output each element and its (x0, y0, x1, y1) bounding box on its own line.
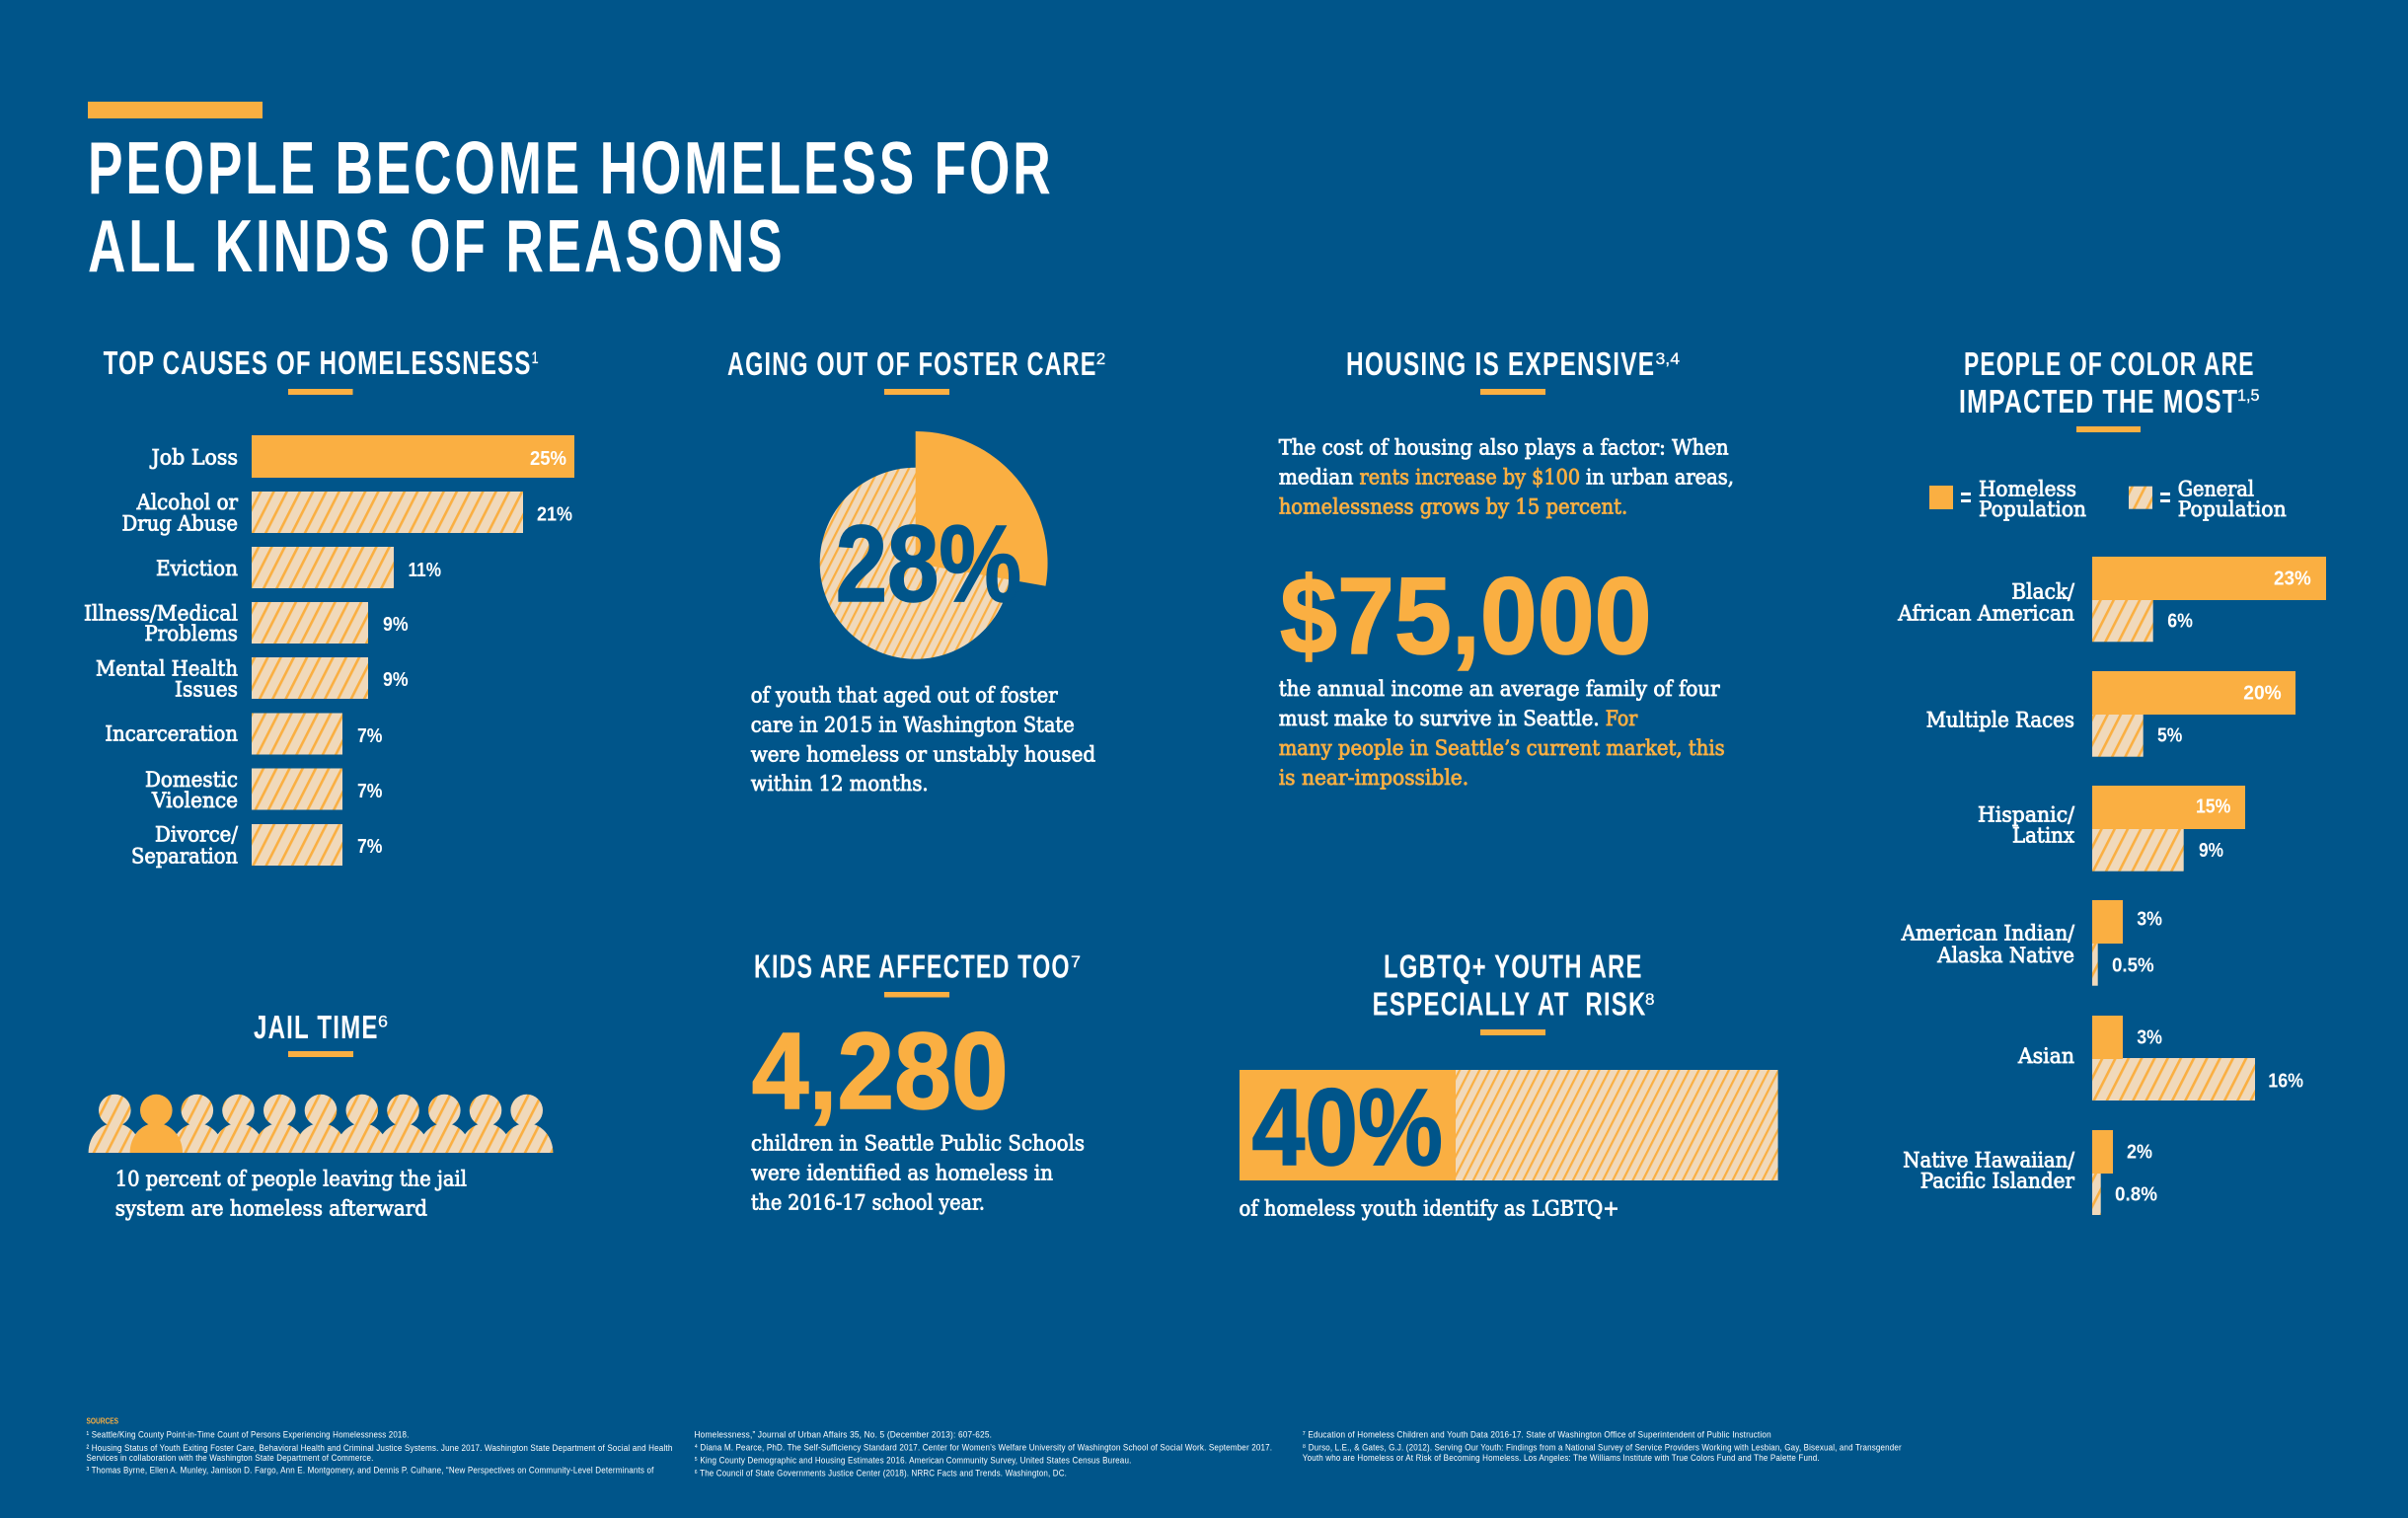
bar: domestic violence 7%: Violence (151, 789, 238, 813)
bars: hispanic/latinx (1978, 786, 2245, 872)
bars: native hawaiian/pacific islander: 2% (2127, 1141, 2152, 1164)
heading: foster care: 2 (1096, 349, 1105, 368)
bars: hispanic/latinx: Hispanic/ (1978, 803, 2075, 828)
text: income statement (1279, 677, 1725, 791)
heading: people of color (1959, 345, 2260, 432)
text: kids statistic (751, 1132, 1085, 1216)
big number: $75,000: $75,000 (1280, 556, 1652, 677)
sources: ² Housing Status of Youth Exiting Foster Care, Behavioral Health and Criminal Justice Systems. June 2017. Washington State Department of Social and Health (87, 1443, 673, 1454)
chart: 40% bar (1240, 1067, 1778, 1188)
bars: multiple races (1926, 671, 2295, 757)
bar: mental health issues 9% (96, 657, 409, 703)
bar: divorce/separation 7% (131, 823, 383, 870)
sources: ⁸ Durso, L.E., & Gates, G.J. (2012). Serving Our Youth: Findings from a National Survey of Service Providers Working with Lesbian, Gay, Bisexual, and Transgender (1303, 1442, 1902, 1453)
bar: job loss 25%: Job Loss (150, 446, 238, 471)
text: cost of housing: median (1279, 466, 1354, 491)
text: income statement: is near-impossible. (1279, 766, 1468, 791)
bars: native hawaiian/pacific islander: 0.8% (2115, 1183, 2157, 1206)
sources: ⁶ The Council of State Governments Justice Center (2018). NRRC Facts and Trends. Washington, DC. (695, 1469, 1067, 1480)
bar: illness/medical problems 9%: Illness/Medical (84, 602, 238, 627)
bar: mental health issues 9%: 9% (383, 668, 409, 691)
heading: jail time: 6 (378, 1013, 388, 1031)
heading: top causes (104, 344, 539, 395)
bar: incarceration 7%: 7% (357, 724, 383, 747)
bar: job loss 25%: 25% (530, 447, 566, 470)
text: income statement: many people in Seattle’s current market, this (1279, 736, 1725, 761)
heading: people of color: IMPACTED THE MOST (1959, 383, 2238, 419)
heading: lgbtq: 8 (1645, 990, 1654, 1009)
sources: ⁴ Diana M. Pearce, PhD. The Self-Sufficiency Standard 2017. Center for Women’s Welfare University of Washington School of Social Work. September 2017. (695, 1443, 1272, 1454)
bars: hispanic/latinx: 9% (2199, 839, 2223, 862)
legend (1929, 478, 2287, 522)
sources (87, 1416, 1902, 1480)
title block: ALL KINDS OF REASONS (88, 205, 786, 288)
panel: top causes of homelessness (84, 344, 574, 870)
bars: asian (2017, 1016, 2303, 1101)
panel: aging out of foster care (727, 345, 1105, 797)
heading: top causes: TOP CAUSES OF HOMELESSNESS (104, 344, 532, 381)
bar: domestic violence 7%: 7% (357, 780, 383, 802)
text: foster care statistic: care in 2015 in Washington State (751, 713, 1075, 738)
heading: foster care (727, 345, 1105, 395)
panel: housing is expensive (1279, 345, 1734, 791)
bars: hispanic/latinx: Latinx (2012, 824, 2074, 849)
bars: native hawaiian/pacific islander: Native Hawaiian/ (1903, 1149, 2075, 1174)
bars: asian: 3% (2137, 1025, 2162, 1048)
text: foster care statistic (751, 684, 1095, 797)
heading: kids (754, 949, 1081, 997)
heading: people of color: PEOPLE OF COLOR ARE (1964, 345, 2255, 382)
sources: ⁵ King County Demographic and Housing Estimates 2016. American Community Survey, United States Census Bureau. (695, 1456, 1131, 1467)
heading: lgbtq (1373, 949, 1654, 1035)
text: kids statistic: the 2016-17 school year. (751, 1191, 985, 1216)
bar: domestic violence 7%: Domestic (145, 768, 238, 793)
panel: kids are affected too (751, 949, 1085, 1216)
text: foster care statistic: within 12 months. (751, 772, 929, 797)
heading: foster care: AGING OUT OF FOSTER CARE (727, 345, 1097, 382)
sources: ⁷ Education of Homeless Children and Youth Data 2016-17. State of Washington Office of Superintendent of Public Instruction (1303, 1430, 1771, 1441)
bars: asian: 16% (2268, 1069, 2303, 1092)
text: jail statistic: 10 percent of people leaving the jail (115, 1168, 467, 1192)
sources: Youth who are Homeless or At Risk of Becoming Homeless. Los Angeles: The Williams Institute with True Colors Fund and The Palette Fund. (1303, 1453, 1820, 1464)
bars: american indian/alaska native: 3% (2137, 908, 2162, 931)
bars: american indian/alaska native: Alaska Native (1936, 944, 2074, 968)
chart: 40% bar: 40% (1251, 1067, 1443, 1188)
bar: incarceration 7%: Incarceration (105, 722, 238, 747)
bar: alcohol or drug abuse 21%: Alcohol or (136, 491, 239, 515)
bar: illness/medical problems 9%: 9% (383, 613, 409, 636)
text: lgbtq statistic: of homeless youth identify as LGBTQ+ (1240, 1197, 1619, 1222)
title block (88, 102, 1054, 288)
heading: people of color: 1,5 (2237, 386, 2260, 405)
legend: General (2178, 478, 2254, 502)
big number: 4,280: 4,280 (752, 1011, 1009, 1132)
bar: illness/medical problems 9%: Problems (144, 622, 238, 646)
bars: multiple races: Multiple Races (1926, 709, 2074, 733)
sources: Homelessness,” Journal of Urban Affairs 35, No. 5 (December 2013): 607-625. (695, 1430, 992, 1441)
text: foster care statistic: were homeless or unstably housed (751, 742, 1095, 768)
bars: black/african american: African American (1897, 602, 2074, 627)
bars: native hawaiian/pacific islander (1903, 1130, 2157, 1215)
text: foster care statistic: of youth that aged out of foster (751, 684, 1058, 709)
bars: multiple races: 20% (2243, 682, 2282, 705)
text: income statement: must make to survive in Seattle. (1279, 707, 1600, 731)
bar: illness/medical problems 9% (84, 602, 409, 646)
bars: multiple races: 5% (2157, 724, 2182, 747)
bar: incarceration 7% (105, 713, 383, 754)
sources: SOURCES (87, 1416, 119, 1425)
sources: Services in collaboration with the Washington State Department of Commerce. (87, 1453, 373, 1464)
text: cost of housing: in urban areas, (1586, 466, 1734, 491)
heading: jail time: JAIL TIME (254, 1009, 379, 1045)
bars: black/african american: 23% (2274, 568, 2311, 590)
heading: housing: HOUSING IS EXPENSIVE (1346, 345, 1655, 382)
legend: Population (1979, 497, 2086, 522)
text: cost of housing (1279, 436, 1734, 520)
text: kids statistic: children in Seattle Public Schools (751, 1132, 1085, 1157)
bar: eviction 11% (156, 547, 441, 588)
panel: jail time (89, 1009, 553, 1222)
bar: alcohol or drug abuse 21%: 21% (537, 503, 572, 525)
bar: eviction 11%: 11% (409, 559, 441, 581)
bars: native hawaiian/pacific islander: Pacific Islander (1920, 1170, 2075, 1194)
bars: black/african american: Black/ (2011, 580, 2075, 605)
text: cost of housing: The cost of housing also plays a factor: When (1279, 436, 1729, 461)
bar: mental health issues 9%: Mental Health (96, 657, 238, 682)
heading: lgbtq: LGBTQ+ YOUTH ARE (1384, 949, 1643, 985)
text: kids statistic: were identified as homeless in (751, 1162, 1053, 1186)
text: cost of housing: homelessness grows by 15 percent. (1279, 495, 1627, 520)
bars: american indian/alaska native (1901, 900, 2162, 986)
bars: american indian/alaska native: 0.5% (2112, 954, 2154, 977)
bars: american indian/alaska native: American Indian/ (1901, 922, 2075, 947)
heading: kids: KIDS ARE AFFECTED TOO (754, 949, 1071, 985)
bar: divorce/separation 7%: Separation (131, 845, 238, 870)
heading: lgbtq: ESPECIALLY AT RISK (1373, 986, 1647, 1023)
legend: Homeless (1979, 478, 2076, 502)
chart: 28% pie: 28% (836, 503, 1021, 625)
bars: asian: Asian (2017, 1044, 2074, 1069)
text: cost of housing: rents increase by $100 (1360, 466, 1580, 491)
heading: top causes: 1 (532, 348, 539, 367)
bars: black/african american (1897, 557, 2326, 642)
sources: ³ Thomas Byrne, Ellen A. Munley, Jamison D. Fargo, Ann E. Montgomery, and Dennis P. Culhane, “New Perspectives on Community-Level Determinants of (87, 1466, 654, 1477)
sources: ¹ Seattle/King County Point-in-Time Count of Persons Experiencing Homelessness 2018. (87, 1430, 409, 1441)
panel: lgbtq+ youth (1240, 949, 1778, 1222)
title block: PEOPLE BECOME HOMELESS FOR (88, 127, 1054, 210)
bar: eviction 11%: Eviction (156, 557, 238, 581)
icon: row of eleven people, one highlighted (89, 1095, 553, 1153)
heading: jail time (254, 1009, 388, 1057)
legend: Population (2178, 497, 2287, 522)
bar: alcohol or drug abuse 21%: Drug Abuse (122, 511, 238, 537)
text: jail statistic (115, 1168, 467, 1222)
bar: mental health issues 9%: Issues (175, 678, 238, 703)
bars: hispanic/latinx: 15% (2196, 795, 2230, 817)
text: jail statistic: system are homeless afterward (115, 1197, 427, 1222)
panel: people of color (1897, 345, 2326, 1215)
bar: divorce/separation 7%: Divorce/ (155, 823, 239, 847)
heading: housing: 3,4 (1656, 349, 1680, 368)
text: income statement: For (1606, 707, 1638, 731)
chart: 28% pie (820, 431, 1048, 659)
bar: domestic violence 7% (145, 768, 383, 813)
bars: black/african american: 6% (2167, 610, 2193, 633)
bar: alcohol or drug abuse 21% (122, 491, 572, 537)
text: income statement: the annual income an average family of four (1279, 677, 1720, 702)
heading: kids: 7 (1071, 952, 1081, 971)
bar: job loss 25% (150, 435, 574, 478)
heading: housing (1346, 345, 1680, 395)
bar: divorce/separation 7%: 7% (357, 835, 383, 858)
